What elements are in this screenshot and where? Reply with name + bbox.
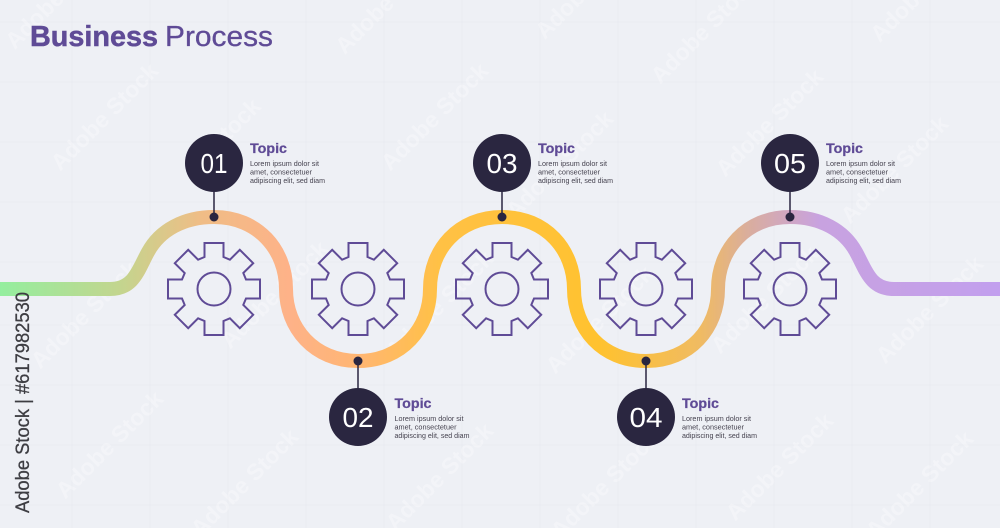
step 02 text — [394, 395, 470, 440]
text: Adobe Stock — [50, 385, 168, 503]
step 01 text — [250, 140, 325, 185]
step 02 text: Lorem ipsum dolor sit — [394, 414, 464, 423]
gear 5 — [744, 243, 836, 335]
step 03 text — [538, 140, 613, 185]
step 05 text — [826, 140, 901, 185]
step 05 marker — [761, 134, 819, 222]
step 01 text: Topic — [250, 140, 287, 156]
step 03 marker: 03 — [486, 148, 518, 179]
step 04 text: Lorem ipsum dolor sit — [682, 414, 751, 423]
step 04 text: amet, consectetuer — [682, 422, 745, 432]
step 01 text: amet, consectetuer — [250, 168, 313, 176]
gear 1 — [168, 243, 260, 335]
step 01 text: Lorem ipsum dolor sit — [250, 159, 319, 168]
step 01 marker: 01 — [200, 148, 228, 179]
step 03 text: Topic — [538, 140, 575, 156]
step 01 text: adipiscing elit, sed diam — [250, 176, 325, 185]
step 02 marker: 02 — [342, 402, 374, 433]
text: Adobe Stock — [500, 105, 618, 223]
text: Adobe Stock — [705, 240, 823, 358]
process flow line — [0, 217, 1000, 361]
text: Adobe Stock — [380, 245, 498, 363]
text: Adobe Stock — [835, 110, 953, 228]
gear 3 — [456, 243, 548, 335]
step 01 marker — [185, 134, 243, 222]
text: Adobe Stock — [720, 407, 838, 525]
step 05 text: Topic — [826, 140, 863, 156]
step 02 text: adipiscing elit, sed diam — [394, 431, 470, 440]
step 04 text: Topic — [682, 395, 719, 411]
step 03 marker — [473, 134, 531, 222]
step 04 text — [682, 395, 757, 440]
title: Business — [30, 21, 158, 53]
title — [30, 21, 273, 53]
step 04 text: adipiscing elit, sed diam — [682, 431, 757, 440]
title: Process — [165, 21, 273, 53]
gear 2 — [312, 243, 404, 335]
text: Adobe Stock — [25, 255, 143, 373]
step 05 text: Lorem ipsum dolor sit — [826, 159, 895, 168]
text: Adobe Stock — [540, 260, 658, 378]
step 04 marker — [617, 356, 675, 446]
step 02 text: amet, consectetuer — [394, 422, 457, 432]
text: Adobe Stock — [215, 235, 333, 353]
step 03 text: adipiscing elit, sed diam — [538, 176, 613, 185]
step 05 text: amet, consectetuer — [826, 168, 889, 176]
text: Stock — [203, 93, 266, 156]
step 05 marker: 05 — [774, 148, 806, 179]
text: Adobe Stock — [45, 57, 163, 175]
step 02 marker — [329, 356, 387, 446]
step 03 text: Lorem ipsum dolor sit — [538, 159, 607, 168]
step 05 text: adipiscing elit, sed diam — [826, 176, 901, 185]
stock credit: Adobe Stock | #617982530 — [13, 292, 34, 513]
gear 4 — [600, 243, 692, 335]
step 03 text: amet, consectetuer — [538, 168, 601, 176]
text: Adobe Stock — [870, 250, 988, 368]
text: Adobe Stock — [710, 63, 828, 181]
step 02 text: Topic — [394, 395, 432, 411]
step 04 marker: 04 — [630, 402, 662, 433]
text: Adobe Stock — [375, 57, 493, 175]
